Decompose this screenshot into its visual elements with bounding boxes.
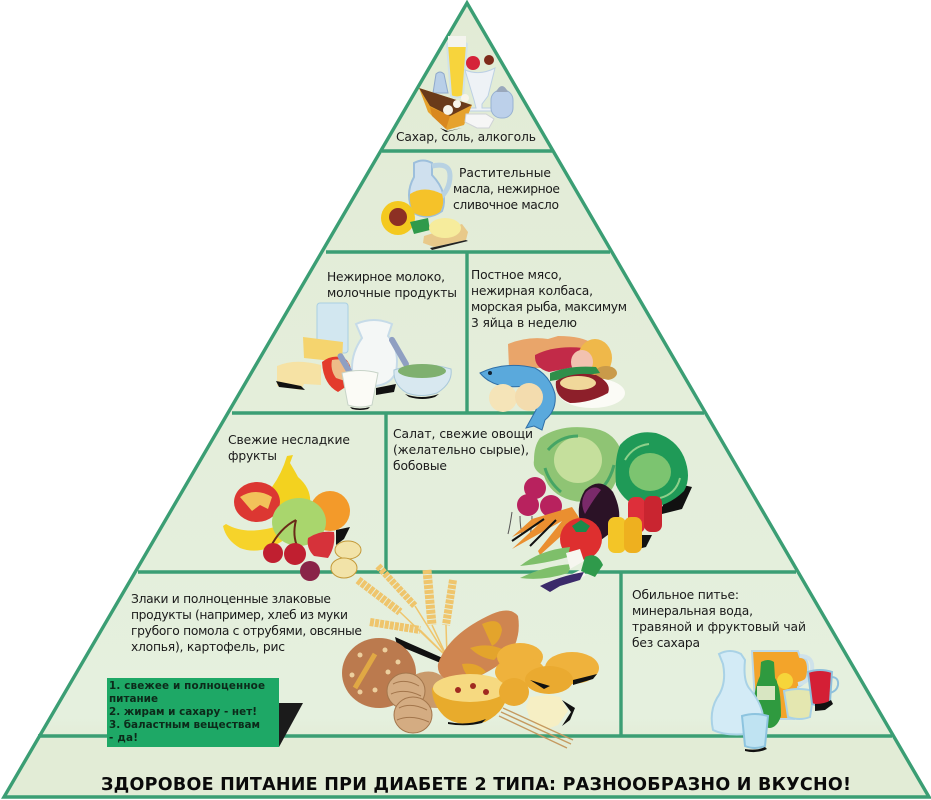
title: ЗДОРОВОЕ ПИТАНИЕ ПРИ ДИАБЕТЕ 2 ТИПА: РАЗНООБРАЗНО И ВКУСНО! (101, 775, 851, 795)
label: fruits: Свежие несладкие (228, 433, 350, 447)
label: oils line 3: сливочное масло (453, 198, 559, 212)
label: meat and fish: Постное мясо, (471, 268, 562, 282)
illustration: grains and bread (342, 566, 599, 748)
label: drinks line 2: минеральная вода, (632, 604, 753, 618)
key point 3 continued: - да! (109, 732, 138, 744)
key point 3: 3. баластным веществам (109, 719, 260, 731)
key point 2: 2. жирам и сахару - нет! (109, 706, 257, 718)
label: grains: Злаки и полноценные злаковые (131, 592, 331, 606)
label: drinks line 4: без сахара (632, 636, 700, 650)
label: vegetables line 3: бобовые (393, 459, 447, 473)
illustration: fruits (223, 455, 361, 581)
illustration: meat and fish (480, 336, 625, 430)
label: grains line 3: грубого помола с отрубями, овсяные (131, 624, 362, 638)
label: meat and fish line 4: 3 яйца в неделю (471, 316, 577, 330)
label: grains line 4: хлопья), картофель, рис (131, 640, 285, 654)
label: drinks line 3: травяной и фруктовый чай (632, 620, 806, 634)
label: sugar, salt, alcohol: Сахар, соль, алкоголь (396, 130, 536, 144)
label: drinks: Обильное питье: (632, 588, 739, 602)
key point 1: 1. свежее и полноценное (109, 680, 265, 692)
label: meat and fish line 2: нежирная колбаса, (471, 284, 593, 298)
label: dairy: Нежирное молоко, (327, 270, 445, 284)
illustration: dairy (276, 303, 451, 410)
label: dairy line 2: молочные продукты (327, 286, 457, 300)
illustration: vegetables (508, 427, 692, 592)
illustration: oils (381, 160, 468, 250)
label: grains line 2: продукты (например, хлеб из муки (131, 608, 348, 622)
label: vegetables: Салат, свежие овощи (393, 427, 533, 441)
label: fruits line 2: фрукты (228, 449, 277, 463)
label: meat and fish line 3: морская рыба, максимум (471, 300, 627, 314)
label: vegetables line 2: (желательно сырые), (393, 443, 529, 457)
illustration: sugar, salt, alcohol (419, 36, 513, 132)
key point 1 continued: питание (109, 693, 158, 705)
label: oils: Растительные (459, 166, 551, 180)
label: oils line 2: масла, нежирное (453, 182, 560, 196)
panel: key points (107, 678, 303, 747)
illustration: drinks (712, 651, 838, 752)
